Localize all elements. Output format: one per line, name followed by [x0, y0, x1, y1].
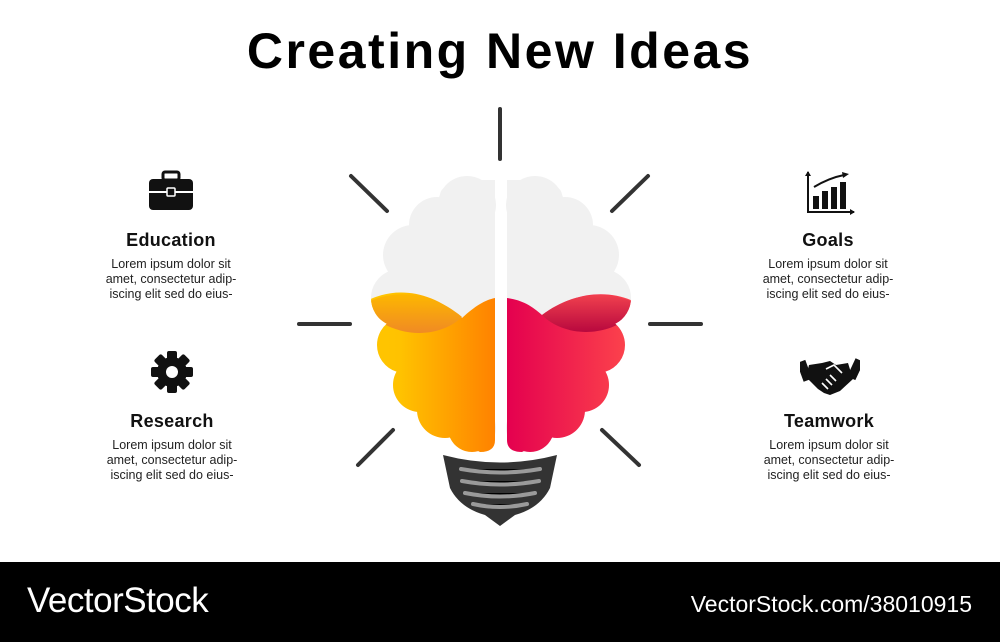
rays: [299, 109, 701, 465]
block: goals: Lorem ipsum dolor sit: [768, 257, 888, 271]
block: goals: amet, consectetur adip-: [763, 272, 893, 286]
left hemisphere: [371, 176, 496, 452]
block: goals: iscing elit sed do eius-: [766, 287, 889, 301]
block: teamwork: [764, 411, 894, 482]
block: education: Education: [126, 230, 216, 250]
icon: gear: [151, 351, 193, 393]
block: research: [107, 411, 237, 482]
block: education: Lorem ipsum dolor sit: [111, 257, 231, 271]
block: teamwork: amet, consectetur adip-: [764, 453, 894, 467]
footer brand: VectorStock: [27, 581, 208, 620]
block: research: amet, consectetur adip-: [107, 453, 237, 467]
block: teamwork: iscing elit sed do eius-: [768, 468, 890, 482]
bulb base: [443, 455, 557, 526]
block: research: Lorem ipsum dolor sit: [112, 438, 232, 452]
block: goals: [763, 230, 893, 301]
right hemisphere: [506, 176, 631, 452]
block: education: iscing elit sed do eius-: [110, 287, 232, 301]
block: education: [106, 230, 236, 301]
block: teamwork: Teamwork: [784, 411, 874, 431]
footer url: VectorStock.com/38010915: [691, 591, 972, 617]
title: Creating New Ideas: [247, 23, 753, 79]
brain bulb: [297, 107, 703, 526]
block: research: Research: [130, 411, 214, 431]
block: research: iscing elit sed do eius-: [110, 468, 233, 482]
icon: chart: [805, 171, 855, 215]
block: goals: Goals: [802, 230, 854, 250]
block: education: amet, consectetur adip-: [106, 272, 236, 286]
icon: briefcase: [149, 170, 193, 210]
icon: handshake: [800, 358, 860, 395]
block: teamwork: Lorem ipsum dolor sit: [769, 438, 889, 452]
footer: [0, 562, 1000, 642]
